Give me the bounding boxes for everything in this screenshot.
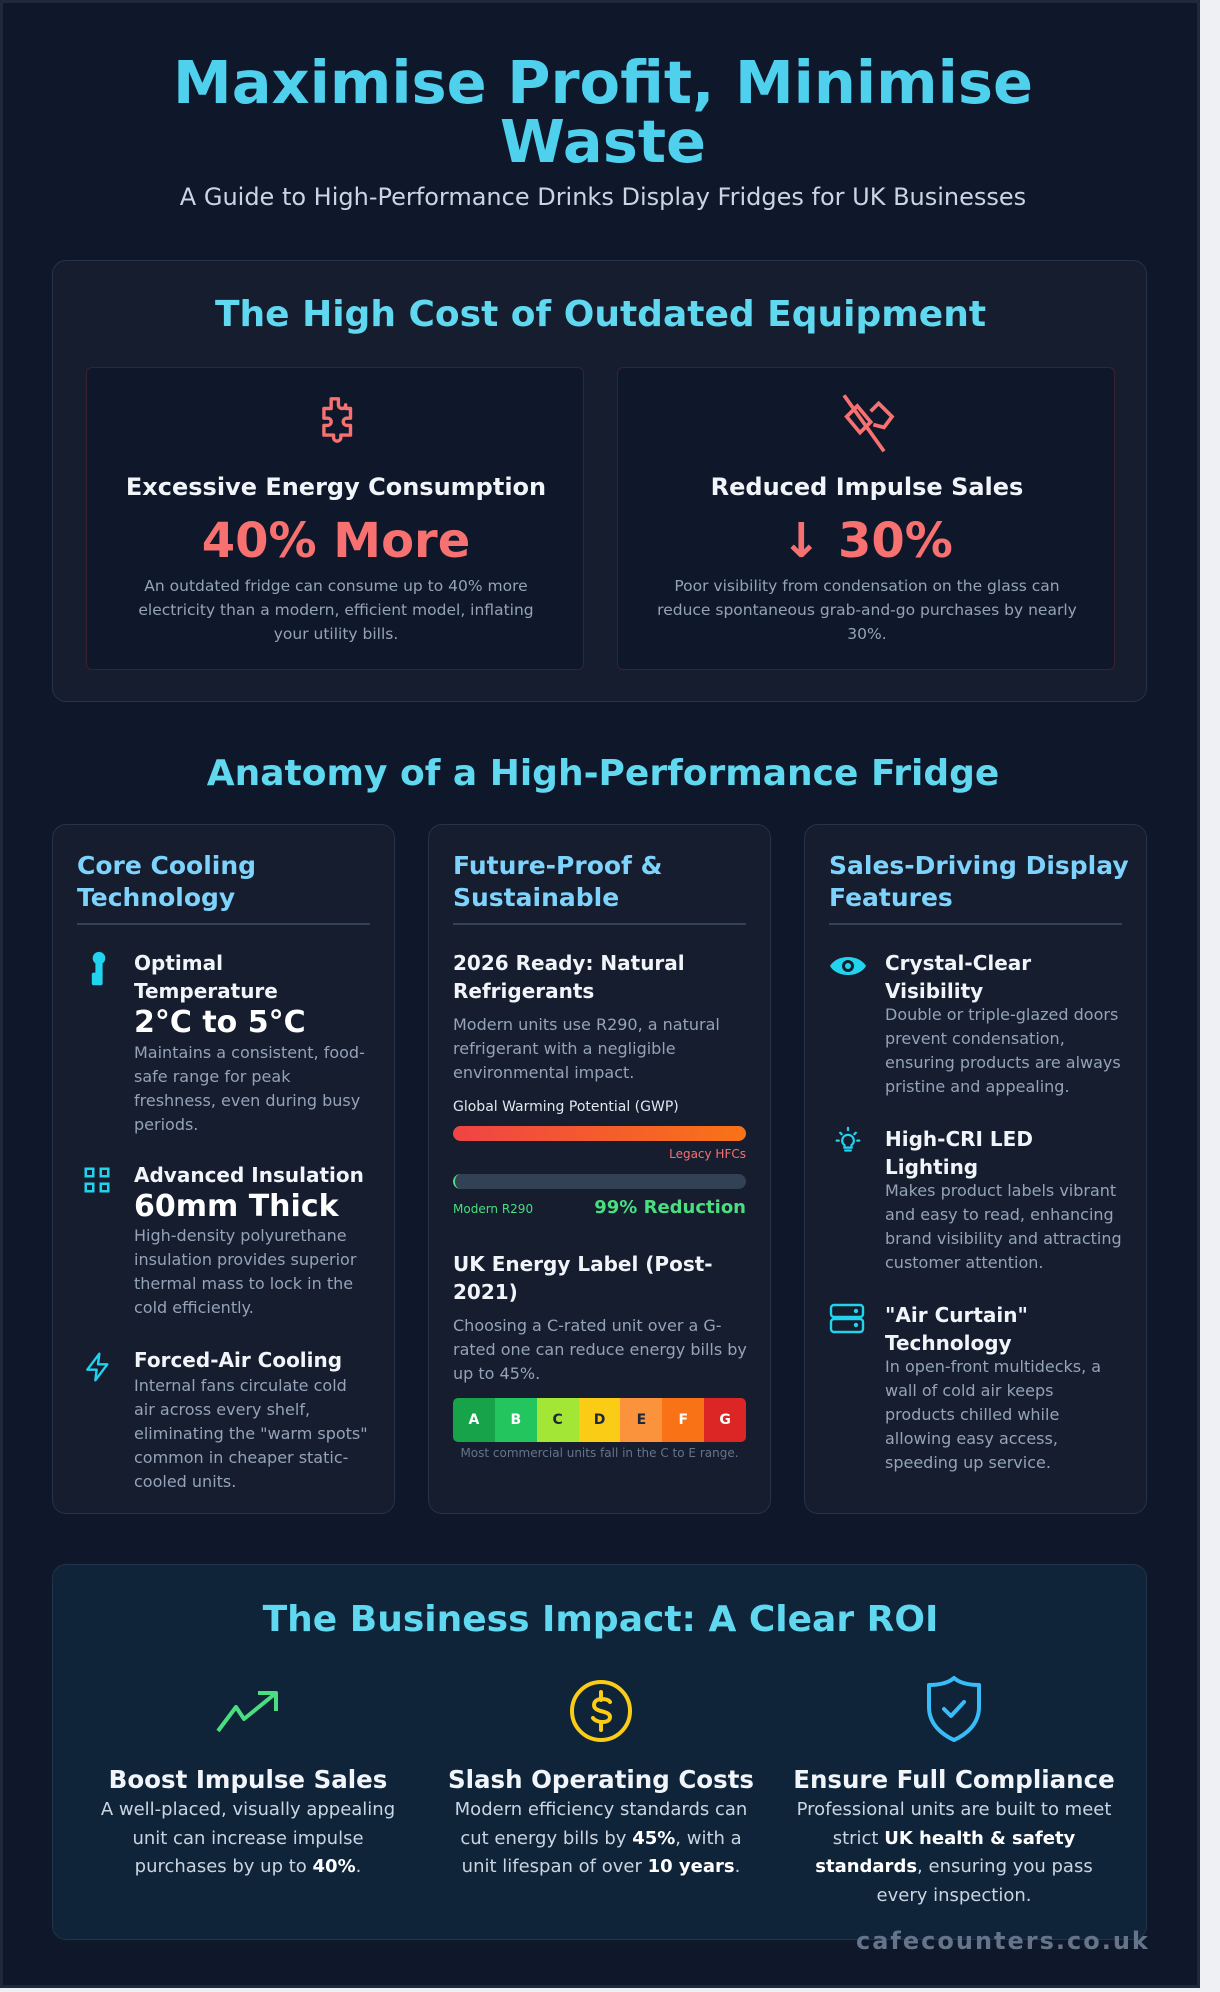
column: boost sales [101,1691,395,1877]
item: forced air: cooled units. [134,1472,236,1491]
panel: sales-driving [804,824,1147,1514]
panel: future-proof: Modern units use R290, a natural refrigerant with a negligible environmental impact. [453,1015,720,1082]
panel: future-proof: Choosing a C-rated unit over a G-rated one can reduce energy bills by up to 45%. [453,1316,747,1383]
title [173,48,1033,176]
column: boost sales: A well-placed, visually appealing [101,1799,395,1820]
column heading: Features [829,883,953,912]
item: temperature: freshness, even during busy [134,1091,360,1110]
chart: GWP: 99% Reduction [594,1197,746,1218]
column: compliance: every inspection. [877,1884,1031,1906]
item: temperature: Optimal [134,951,223,975]
panel: business impact [52,1564,1147,1940]
column: compliance: Professional units are built to meet [797,1799,1111,1820]
icon: server [830,1304,864,1334]
item: air curtain: allowing easy access, [885,1429,1058,1448]
icon: bulb [836,1126,860,1152]
item: visibility: ensuring products are always [885,1053,1121,1072]
icon: trending up [216,1691,278,1732]
column: slash costs: cut energy bills by 45%, with a [460,1828,742,1848]
column heading [829,851,1129,912]
column: slash costs: Modern efficiency standards can [455,1799,747,1820]
note: Most commercial units fall in the C to E range. [460,1446,739,1460]
column: slash costs: Slash Operating Costs [448,1765,754,1794]
chart: energy rating scale: F [678,1412,688,1428]
card title: Reduced Impulse Sales [711,473,1023,501]
chart: energy rating scale: A [468,1412,479,1428]
column: compliance: standards, ensuring you pass [815,1856,1093,1877]
item: forced air: Forced-Air Cooling [134,1348,342,1372]
icon: dollar coin [570,1680,632,1742]
item: LED: and easy to read, enhancing [885,1205,1114,1224]
heading: ROI: The Business Impact: A Clear ROI [263,1599,938,1640]
item: LED: brand visibility and attracting [885,1229,1122,1248]
column: compliance [793,1676,1115,1906]
chart: energy rating scale: B [510,1412,521,1428]
item: visibility: Double or triple-glazed doors [885,1005,1118,1024]
item: temperature: periods. [134,1115,198,1134]
column heading: Core Cooling [77,851,256,880]
item: air curtain: wall of cold air keeps [885,1381,1053,1400]
item: energy label: UK Energy Label (Post-2021) [453,1252,713,1304]
chart: energy rating scale: G [719,1412,731,1428]
item: visibility [830,951,1121,1096]
chart: GWP: Legacy HFCs [669,1147,746,1161]
stat: ↓ 30% [781,513,953,569]
item: temperature: Temperature [134,979,278,1003]
item: temperature: 2°C to 5°C [134,1005,306,1040]
item: air curtain: In open-front multidecks, a [885,1357,1101,1376]
column heading: Sustainable [453,883,619,912]
item: forced air: eliminating the "warm spots" [134,1424,368,1443]
item: forced air [86,1348,368,1491]
description: Poor visibility from condensation on the glass can reduce spontaneous grab-and-go purchases by nearly 30%. [657,577,1077,643]
column: boost sales: Boost Impulse Sales [109,1765,387,1794]
item: refrigerants: 2026 Ready: Natural Refrigerants [453,951,685,1003]
column: slash costs: unit lifespan of over 10 years. [462,1856,740,1877]
item: air curtain: Technology [885,1331,1012,1355]
icon: eye [830,957,866,975]
heading: anatomy: Anatomy of a High-Performance Fridge [207,753,999,794]
panel: core cooling [52,824,395,1514]
chart: energy rating scale: D [594,1412,605,1428]
item: insulation: cold efficiently. [134,1298,254,1317]
column heading: Future-Proof & [453,851,662,880]
item: air curtain: speeding up service. [885,1453,1051,1472]
item: LED [836,1126,1122,1272]
item: temperature: safe range for peak [134,1067,290,1086]
item: temperature [92,951,365,1134]
chart: energy rating scale: E [637,1412,646,1428]
chart: GWP [453,1099,746,1218]
icon: thermometer [92,952,106,986]
item: air curtain [830,1303,1101,1472]
icon: puzzle [322,397,352,443]
icon: grid [84,1168,110,1192]
column heading: Sales-Driving Display [829,851,1129,880]
card: energy [86,367,584,670]
description: An outdated fridge can consume up to 40% more electricity than a modern, efficient model, inflating your utility bills. [138,577,534,643]
item: forced air: Internal fans circulate cold [134,1376,347,1395]
item: air curtain: products chilled while [885,1405,1059,1424]
heading: high cost: The High Cost of Outdated Equipment [215,294,986,335]
item: LED: Lighting [885,1155,978,1179]
column heading [77,851,256,912]
column heading: Technology [77,883,235,912]
column: slash costs [448,1680,754,1877]
item: insulation: thermal mass to lock in the [134,1274,353,1293]
icon: shield check [927,1676,981,1742]
column heading [453,851,662,912]
panel: future-proof [428,824,771,1514]
subtitle: A Guide to High-Performance Drinks Display Fridges for UK Businesses [180,183,1026,211]
chart: energy rating scale: C [552,1412,563,1428]
stat: 40% More [202,513,470,569]
watermark: cafecounters.co.uk [856,1927,1150,1955]
title: Maximise Profit, Minimise [173,48,1033,117]
item: air curtain: "Air Curtain" [885,1303,1028,1327]
card: impulse sales [617,367,1115,670]
chart: GWP: Modern R290 [453,1202,533,1216]
item: temperature: Maintains a consistent, food- [134,1043,365,1062]
item: insulation: Advanced Insulation [134,1163,364,1187]
item: insulation: insulation provides superior [134,1250,356,1269]
column: boost sales: purchases by up to 40%. [135,1856,361,1877]
item: visibility: Crystal-Clear [885,951,1031,975]
item: visibility: Visibility [885,979,983,1003]
chart: GWP: Global Warming Potential (GWP) [453,1099,679,1115]
item: visibility: pristine and appealing. [885,1077,1070,1096]
item: forced air: common in cheaper static- [134,1448,348,1467]
icon: tag off [842,394,894,452]
column: compliance: strict UK health & safety [833,1828,1075,1848]
item: insulation: 60mm Thick [134,1189,339,1224]
column: compliance: Ensure Full Compliance [793,1765,1115,1794]
item: LED: High-CRI LED [885,1127,1033,1151]
item: insulation: High-density polyurethane [134,1226,347,1245]
icon: bolt [86,1352,109,1382]
item: LED: Makes product labels vibrant [885,1181,1116,1200]
card title: Excessive Energy Consumption [126,473,546,501]
item: insulation [84,1163,364,1317]
column: boost sales: unit can increase impulse [132,1828,364,1848]
panel: high cost [52,260,1147,702]
item: forced air: air across every shelf, [134,1400,310,1419]
item: LED: customer attention. [885,1253,1044,1272]
item: visibility: prevent condensation, [885,1029,1065,1048]
title: Waste [500,107,706,176]
chart: energy rating scale [453,1398,746,1442]
